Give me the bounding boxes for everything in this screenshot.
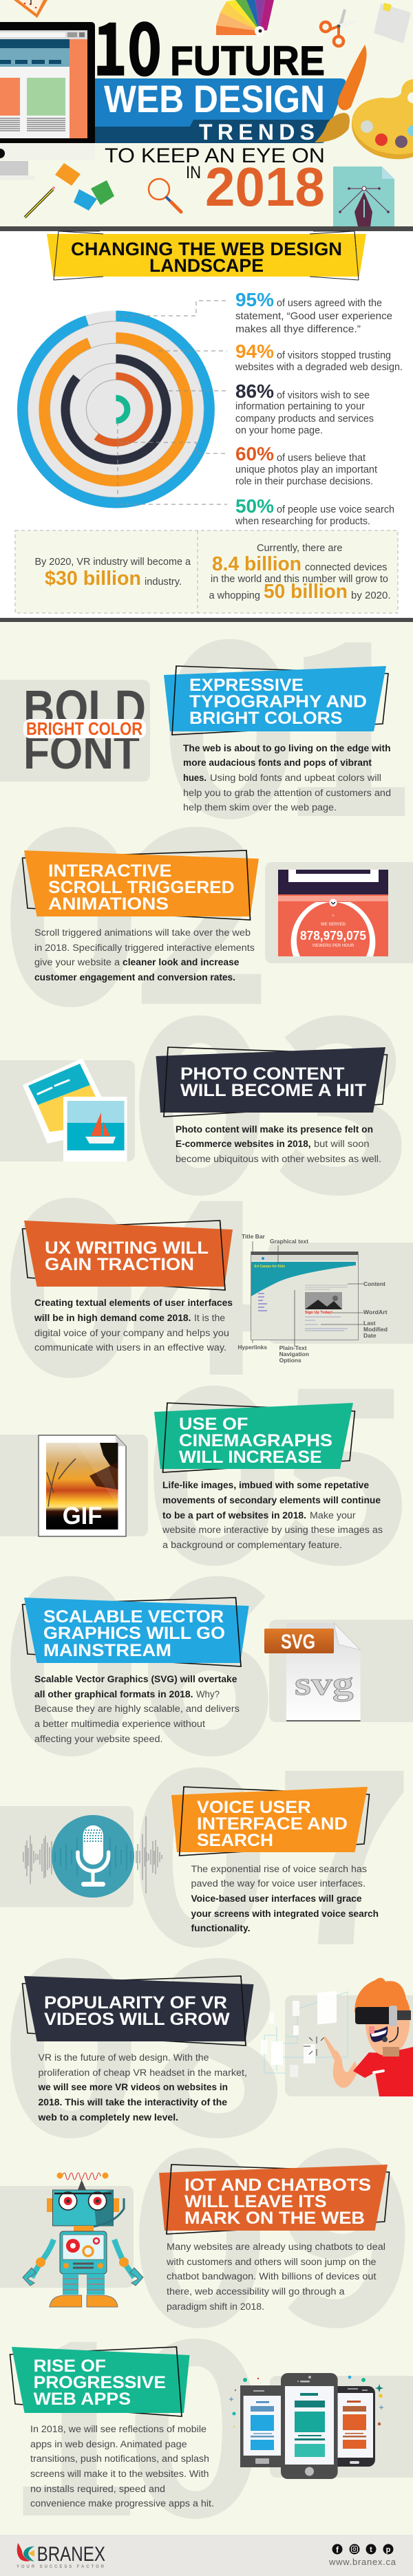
body text: Life-like images, imbued with some repetative — [162, 1480, 369, 1490]
body text: no installs required, speed and — [30, 2484, 165, 2494]
arc: 95% — [23, 316, 209, 503]
panel: UX annotated wireframe: Last — [363, 1320, 376, 1327]
callout: connected devices: in the world and this number will grow to — [211, 574, 388, 585]
banner: progressive web apps: PROGRESSIVE — [34, 2373, 166, 2392]
body text: functionality. — [191, 1923, 251, 1933]
ghost number 02: 2 — [131, 724, 273, 1073]
banner: scalable vector graphics: SCALABLE VECTOR — [43, 1607, 224, 1627]
body text: paved the way for voice user interfaces. — [191, 1878, 366, 1889]
body text: but will soon — [314, 1139, 369, 1149]
banner: scroll triggered animations — [22, 850, 259, 920]
banner: scroll triggered animations: INTERACTIVE — [48, 861, 172, 881]
banner: scalable vector graphics — [22, 1598, 249, 1666]
divider bar middle — [0, 618, 413, 622]
body text: to be a part of websites in 2018. — [162, 1510, 306, 1521]
body text: website more interactive by using these images as — [162, 1525, 383, 1535]
character: arm — [324, 2037, 358, 2087]
character: shirt — [353, 2047, 413, 2096]
panel: scroll animation screenshot — [265, 862, 413, 963]
body text: Make your — [310, 1510, 356, 1521]
banner: VR videos: VIDEOS WILL GROW — [44, 2010, 230, 2029]
body text: In 2018, we will see reflections of mobile — [30, 2424, 206, 2434]
section 04: UX writing — [0, 1095, 413, 1444]
icon: wall clock — [14, 0, 47, 18]
panel: bold font illustration — [0, 680, 150, 782]
panel: UX annotated wireframe: Options — [279, 1357, 301, 1364]
stat: 50%: 50% — [235, 495, 274, 517]
panel: UX annotated wireframe: Date — [363, 1332, 377, 1339]
ghost number 03: 3 — [273, 913, 413, 1262]
body text — [34, 1674, 240, 1744]
banner: expressive typography — [164, 666, 388, 735]
body text: The web is about to go living on the edge with — [183, 743, 391, 753]
section 08: VR videos — [0, 1856, 413, 2204]
body text: It is the — [194, 1313, 225, 1323]
body text — [34, 1298, 233, 1353]
banner: progressive web apps: RISE OF — [34, 2357, 106, 2376]
body text: screens will make it to the websites. With — [30, 2469, 209, 2479]
stat: 86%: of visitors wish to see — [277, 390, 370, 401]
ghost number 09: 0 — [129, 2046, 271, 2394]
ghost number 04 — [0, 1095, 271, 1444]
panel: UX annotated wireframe — [238, 1233, 413, 1364]
panel: SVG file icon: SVG — [281, 1631, 315, 1653]
header section — [0, 0, 413, 226]
ghost number 05: 5 — [273, 1283, 413, 1632]
body text: will be in high demand come 2018. — [34, 1313, 191, 1323]
decorative dots and sparkles — [229, 2376, 383, 2427]
section 09: IoT and chatbots — [0, 2046, 413, 2394]
banner: IoT and chatbots: MARK ON THE WEB — [184, 2209, 365, 2228]
ghost number 03: 0 — [129, 913, 271, 1262]
section 03: photo content — [0, 913, 413, 1262]
panel: UX annotated wireframe: Hyperlinks — [238, 1344, 267, 1351]
icon: pencil — [25, 186, 55, 217]
ghost number 06: 0 — [0, 1474, 142, 1823]
panel: UX annotated wireframe: Sign Up Today! — [305, 1311, 332, 1315]
ghost number 08: 8 — [147, 1856, 288, 2204]
body text: Using bold fonts and upbeat colors will — [210, 773, 381, 783]
body text: Because they are highly scalable, and delivers — [34, 1704, 240, 1714]
banner: progressive web apps: WEB APPS — [34, 2390, 131, 2409]
banner: scroll triggered animations: ANIMATIONS — [48, 894, 169, 914]
icon: paper note — [374, 3, 411, 43]
body text: give your website a — [34, 957, 120, 967]
body text: Why? — [196, 1689, 220, 1699]
banner: cinemagraphs — [154, 1403, 355, 1472]
robot — [23, 2173, 143, 2307]
banner: voice user interface — [171, 1787, 369, 1856]
stat: 95%: of users agreed with the — [277, 298, 382, 309]
stat: 50%: when researching for products. — [235, 516, 370, 527]
section 10: progressive web apps — [3, 2236, 413, 2576]
stat: 50% — [235, 495, 394, 527]
banner: VR videos: POPULARITY OF VR — [44, 1993, 227, 2012]
body text: we will see more VR videos on websites in — [37, 2082, 228, 2092]
ghost number 08 — [0, 1856, 288, 2204]
callout: connected devices: 8.4 billion — [212, 553, 301, 575]
banner: expressive typography: TYPOGRAPHY AND — [189, 692, 367, 711]
body text — [30, 2424, 214, 2509]
body text: chatbot bandwagon. With billions of devices out — [167, 2271, 377, 2282]
stat: 60%: 60% — [235, 443, 274, 464]
stat: 60%: of users believe that — [277, 453, 366, 464]
body text: digital voice of your company and helps you — [34, 1328, 229, 1338]
banner: photo content: PHOTO CONTENT — [180, 1064, 344, 1084]
body text — [162, 1480, 383, 1550]
arc: 86% — [65, 359, 167, 460]
panel: VR and devices callouts — [15, 530, 398, 613]
callout: connected devices: 50 billion — [264, 581, 348, 603]
body text: transitions, push notifications, and splash — [30, 2454, 209, 2464]
banner: expressive typography: EXPRESSIVE — [189, 676, 304, 695]
banner: scalable vector graphics: MAINSTREAM — [43, 1641, 171, 1660]
ghost number 10 — [3, 2236, 266, 2576]
title: in: IN — [186, 163, 201, 182]
ghost number 07 — [129, 1665, 413, 2014]
phone: right — [330, 2386, 375, 2467]
banner: scalable vector graphics: GRAPHICS WILL GO — [43, 1624, 225, 1643]
banner: photo content: WILL BECOME A HIT — [180, 1081, 366, 1100]
callout: connected devices: Currently, there are — [257, 543, 343, 554]
footer — [0, 2535, 413, 2576]
icon: colour tiles — [55, 163, 114, 211]
body text: more audacious fonts and pops of vibrant — [183, 758, 372, 768]
ghost number 10: 1 — [3, 2236, 145, 2576]
panel: microphone illustration — [0, 1806, 162, 1907]
banner: VR videos — [22, 1976, 253, 2046]
banner: voice user interface: SEARCH — [197, 1831, 273, 1850]
body text: Scroll triggered animations will take over the web — [34, 927, 251, 938]
ghost number 03 — [129, 913, 413, 1262]
logo: Branex: BRANEX — [37, 2543, 105, 2566]
panel: UX annotated wireframe: Graphical text — [270, 1238, 308, 1245]
banner: photo content — [156, 1047, 387, 1117]
body text: 2018. This will take the interactivity of the — [39, 2097, 227, 2107]
stat: 60%: unique photos play an important — [235, 464, 377, 475]
arc: 60% — [83, 376, 149, 443]
stat: 95% — [235, 289, 392, 335]
body text: become ubiquitous with other websites as well. — [176, 1154, 381, 1164]
callout: VR industry: $30 billion — [45, 568, 141, 590]
ghost number 06 — [0, 1474, 278, 1823]
body text: affecting your website speed. — [34, 1734, 162, 1744]
stat: 60% — [235, 443, 377, 487]
website url: www.branex.ca — [328, 2557, 396, 2567]
stat: 86%: 86% — [235, 380, 274, 402]
body text: a better multimedia experience without — [34, 1719, 205, 1729]
ghost number 05 — [143, 1283, 413, 1632]
divider bar top — [0, 226, 413, 231]
body text: Photo content will make its presence felt on — [176, 1124, 373, 1135]
banner: expressive typography: BRIGHT COLORS — [189, 709, 343, 728]
icon: microphone — [52, 1815, 134, 1898]
ghost number 01 — [159, 537, 413, 886]
panel: phones illustration — [229, 2373, 413, 2479]
ghost number 01: 0 — [159, 537, 301, 886]
callout: connected devices: a whopping — [209, 590, 260, 601]
ghost number 04: 4 — [129, 1095, 271, 1444]
panel: stats background — [0, 231, 413, 618]
stat: 86% — [235, 380, 374, 436]
panel: scroll animation screenshot: WE SERVED — [321, 923, 346, 927]
panel: UX annotated wireframe: Art Camps for Kids — [254, 1265, 285, 1269]
callout: connected devices: connected devices — [305, 562, 387, 573]
body text: with customers and others will soon jump on the — [166, 2257, 376, 2267]
stat: 94%: websites with a degraded web design. — [235, 362, 403, 373]
body text — [37, 2052, 247, 2123]
icon: magnifying glass — [149, 179, 181, 212]
title: 2018: 2018 — [205, 156, 325, 217]
ghost number 05: 0 — [143, 1283, 285, 1632]
stat: 86%: company products and services — [235, 414, 374, 425]
body text — [34, 927, 255, 983]
panel: bold font illustration: BRIGHT COLOR — [26, 718, 142, 739]
icon: pen tool document — [333, 167, 394, 226]
social icons: f — [336, 2545, 339, 2555]
body text — [166, 2242, 385, 2312]
stat: 95%: 95% — [235, 289, 274, 310]
title: to keep an eye on: TO KEEP AN EYE ON — [105, 144, 325, 167]
panel: UX annotated wireframe: Navigation — [279, 1351, 309, 1357]
logo: Branex — [17, 2543, 105, 2569]
banner: cinemagraphs: USE OF — [179, 1415, 248, 1434]
panel: UX annotated wireframe: WordArt — [363, 1309, 388, 1316]
title block — [93, 0, 346, 217]
body text — [176, 1124, 381, 1164]
section 06: scalable vector graphics — [0, 1474, 413, 1823]
banner: UX writing: GAIN TRACTION — [45, 1255, 194, 1274]
logo: Branex: YOUR SUCCESS FACTOR — [17, 2565, 105, 2569]
body text — [183, 743, 391, 813]
panel: photos illustration — [0, 1058, 135, 1161]
social icons — [332, 2544, 394, 2555]
ghost number 09 — [129, 2046, 413, 2394]
banner: UX writing: UX WRITING WILL — [45, 1238, 209, 1258]
stat: 86%: on your home page. — [235, 425, 323, 436]
panel: VR user illustration — [261, 1977, 413, 2096]
callout: connected devices: by 2020. — [351, 590, 391, 601]
panel: bold font illustration: FONT — [23, 725, 140, 779]
body text: VR is the future of web design. With the — [39, 2052, 209, 2063]
panel: robot illustration — [0, 2173, 143, 2307]
body text: proliferation of cheap VR headset in the market, — [39, 2068, 247, 2078]
panel: UX annotated wireframe: Content — [363, 1280, 385, 1287]
panel: UX annotated wireframe: Modified — [363, 1326, 388, 1333]
banner: cinemagraphs: WILL INCREASE — [179, 1448, 322, 1467]
stat: 86%: information pertaining to your — [235, 401, 365, 412]
body text — [191, 1864, 379, 1933]
panel: bold font illustration: BOLD — [23, 680, 146, 737]
body text: The exponential rise of voice search has — [191, 1864, 367, 1874]
callout: connected devices — [209, 543, 391, 603]
section 07: voice user interface — [0, 1665, 413, 2014]
stat: 94%: 94% — [235, 341, 274, 362]
banner: scroll triggered animations: SCROLL TRIGGERED — [48, 878, 235, 897]
phone: left — [240, 2385, 285, 2467]
banner: IoT and chatbots: WILL LEAVE ITS — [184, 2192, 326, 2211]
title banner — [95, 78, 346, 143]
ghost number 04: 0 — [0, 1095, 142, 1444]
callout: VR industry — [34, 557, 191, 590]
monitor illustration — [0, 22, 95, 180]
stat: 95%: statement, “Good user experience — [235, 311, 392, 322]
body text: convenience make progressive apps a hit. — [30, 2498, 214, 2509]
panel: UX annotated wireframe: Plain-Text — [279, 1344, 307, 1351]
stat: 94% — [235, 341, 403, 373]
virtual panels — [261, 1991, 348, 2077]
title: WEB DESIGN: WEB DESIGN — [104, 77, 325, 120]
banner: voice user interface: VOICE USER — [197, 1798, 311, 1817]
banner: IoT and chatbots — [159, 2165, 390, 2234]
banner: IoT and chatbots: IOT AND CHATBOTS — [184, 2176, 371, 2195]
section 01: expressive typography — [0, 537, 413, 886]
body text: in 2018. Specifically triggered interactive elements — [34, 943, 255, 953]
panel: GIF file icon — [0, 1435, 148, 1536]
stat: 94%: of visitors stopped trusting — [277, 350, 391, 361]
body text: Scalable Vector Graphics (SVG) will overtake — [34, 1674, 237, 1684]
banner: UX writing — [22, 1221, 233, 1290]
ghost number 06: 6 — [136, 1474, 278, 1823]
heading: changing the web design landscape: CHANGING THE WEB DESIGN — [71, 239, 342, 259]
ghost number 02: 0 — [0, 724, 142, 1073]
dashed connectors — [116, 301, 227, 504]
panel: UX annotated wireframe: Title Bar — [242, 1233, 266, 1240]
title: TRENDS: TRENDS — [199, 120, 315, 144]
body text: Many websites are already using chatbots to deal — [167, 2242, 385, 2252]
radial bar chart — [17, 311, 215, 508]
icon: sound waveform — [23, 1816, 162, 1893]
panel: scroll animation screenshot: × — [332, 914, 335, 919]
heading: changing the web design landscape — [47, 231, 366, 280]
body text: your screens with integrated voice search — [191, 1909, 379, 1919]
body text: help them skim over the web page. — [183, 802, 337, 813]
title: FUTURE: FUTURE — [170, 38, 325, 84]
heading: changing the web design landscape: LANDSCAPE — [149, 255, 264, 276]
stat: 50%: of people use voice search — [277, 504, 394, 515]
body text: customer engagement and conversion rates. — [34, 972, 235, 983]
character: head — [365, 1999, 410, 2056]
body text: hues. — [183, 773, 206, 783]
banner: cinemagraphs: CINEMAGRAPHS — [179, 1431, 332, 1450]
body text: help you to grab the attention of customers and — [183, 788, 391, 798]
body text: Creating textual elements of user interfaces — [34, 1298, 233, 1308]
icon: scissors — [321, 9, 357, 46]
phone: centre — [281, 2373, 338, 2479]
stat: 60%: role in their purchase decisions. — [235, 476, 373, 487]
social icons: t — [370, 2546, 372, 2554]
banner: progressive web apps — [10, 2347, 190, 2416]
section 02: scroll triggered animations — [0, 724, 413, 1073]
arc: 94% — [44, 338, 187, 481]
body text: a background or complementary feature. — [162, 1540, 342, 1550]
body text: web to a completely new level. — [37, 2112, 178, 2123]
arc: 50% — [105, 398, 127, 421]
body text: E-commerce websites in 2018, — [176, 1139, 311, 1149]
body text: there, web accessibility will go through a — [167, 2286, 345, 2297]
social icons: p — [386, 2546, 391, 2554]
body text: cleaner look and increase — [123, 957, 240, 967]
body text: movements of secondary elements will continue — [162, 1495, 381, 1505]
ghost number 10: 0 — [125, 2236, 266, 2576]
callout: VR industry: By 2020, VR industry will become a — [34, 557, 191, 568]
callout: VR industry: industry. — [145, 577, 182, 588]
body text: all other graphical formats in 2018. — [34, 1689, 193, 1699]
icon: paint palette — [352, 79, 413, 159]
panel: SVG file icon — [264, 1620, 413, 1722]
ghost number 07: 7 — [273, 1665, 413, 2014]
panel: SVG file icon: svg — [295, 1666, 354, 1702]
icon: paint brush — [315, 45, 367, 142]
panel: GIF file icon: GIF — [63, 1503, 102, 1530]
section 05: cinemagraphs — [0, 1283, 413, 1632]
ghost number 08: 0 — [0, 1856, 142, 2204]
body text: communicate with users in an effective way. — [34, 1342, 226, 1353]
panel: scroll animation screenshot: VIEWERS PER HOUR — [312, 944, 354, 948]
banner: voice user interface: INTERFACE AND — [197, 1814, 348, 1834]
ghost number 02 — [0, 724, 273, 1073]
body text: Voice-based user interfaces will grace — [191, 1893, 362, 1904]
ghost number 07: 0 — [129, 1665, 271, 2014]
icon: colour swatch fan — [216, 0, 274, 36]
body text: apps in web design. Animated page — [30, 2439, 187, 2449]
panel: scroll animation screenshot: 878,979,075 — [300, 929, 366, 943]
body text: paradigm shift in 2018. — [167, 2301, 264, 2312]
stat: 95%: makes all thye difference.” — [235, 324, 361, 335]
